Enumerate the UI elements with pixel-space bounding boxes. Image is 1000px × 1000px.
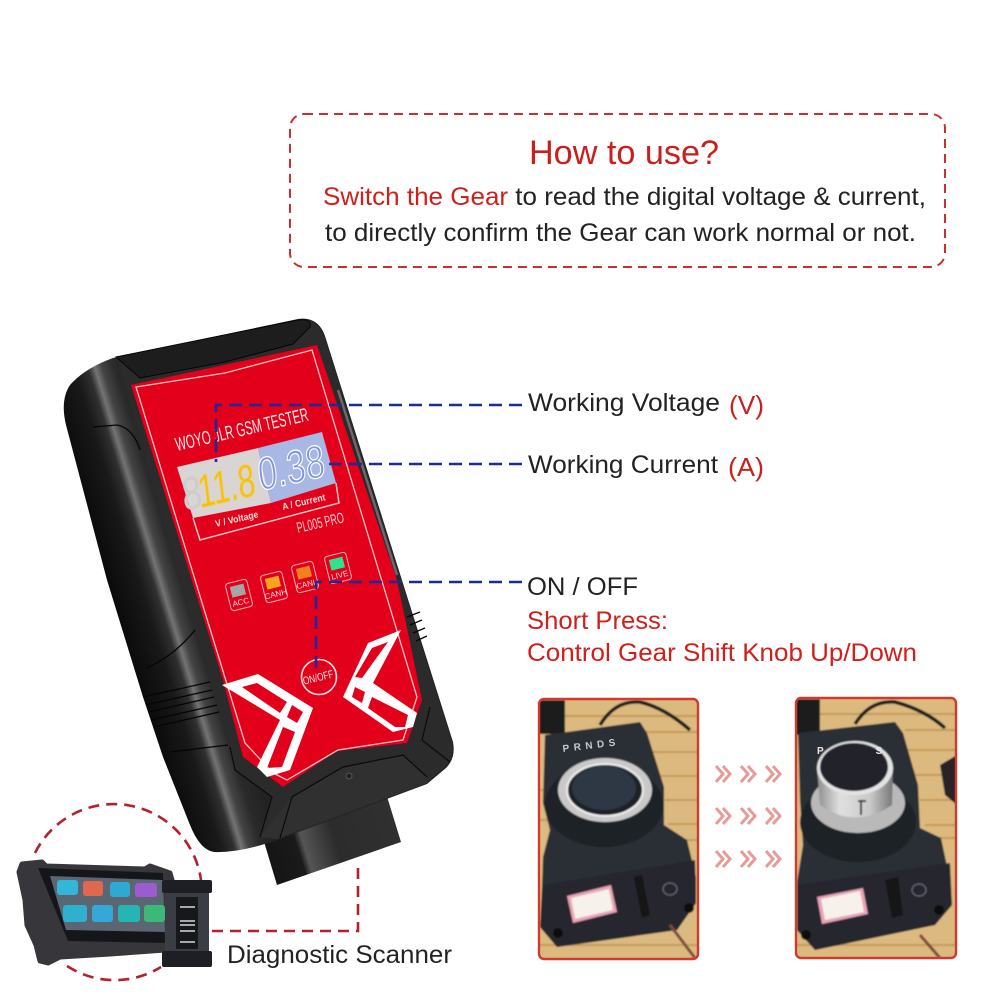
bottom bezel edge lines [230,707,450,838]
connector [262,790,401,885]
heading: How to use? [529,134,719,172]
bottom cap [260,755,427,839]
label: working current [528,451,764,482]
led: LIVE: LIVE [330,569,349,582]
display [177,432,339,540]
photo label: PRNDS: PRNDS [562,737,620,755]
red face panel [131,345,422,787]
panel title: WOYO JLR GSM TESTER [173,405,311,456]
label: working voltage: (V) [729,390,764,420]
tablet screen [38,868,165,943]
arrows: chevrons [716,766,780,867]
voltage caption: V / Voltage [214,509,260,530]
on/off button [302,660,336,694]
app icons [57,880,165,922]
on/off leader [316,582,522,668]
photo label: P S: P S [817,746,883,757]
led: CANH [260,571,289,603]
row 1 [716,766,780,782]
label: working current: (A) [728,452,764,482]
label: working current: Working Current [528,451,718,479]
left white emblem [222,674,313,777]
led: LIVE [324,552,352,584]
device: tester [64,319,454,885]
led: CANL: CANL [295,577,319,591]
model name: PL005 PRO [295,510,346,537]
connector lines: red dashed [35,804,358,980]
label: working voltage: Working Voltage [528,389,720,417]
current reading: 0.38 [255,434,327,501]
screw [346,773,352,779]
photo frame [539,699,698,959]
photo: knob raised [795,697,957,959]
tablet body [19,862,172,963]
label: on/off instructions: Short Press: [527,607,668,635]
callout: how to use box [290,114,945,267]
link to connector [212,862,358,931]
current leader [327,463,522,465]
row 2 [716,808,780,824]
label: on/off instructions [527,573,917,667]
led: CANL [291,561,319,593]
circle around scanner [35,804,201,880]
scanner: tablet and module [19,862,212,967]
right white emblem [343,630,417,732]
current caption: A / Current [281,492,327,513]
display current window [258,432,336,503]
instruction line 2: to directly confirm the Gear can work normal or not. [325,219,916,247]
ghost digit: 8 [179,465,205,521]
led: ACC [225,579,253,611]
tablet screen glow [50,876,165,932]
instruction line 1: Switch the Gear to read the digital voltage & current, [323,183,926,211]
white inset outline [136,350,417,780]
dashed frame [290,114,945,267]
front bezel [118,320,453,839]
on/off button: ON/OFF [302,668,335,688]
grip grooves [93,425,228,752]
right side rail [338,390,397,575]
display frame [193,483,339,540]
photo frame [796,698,956,958]
top cap [116,320,310,378]
display voltage window [177,448,271,518]
device body [64,319,454,852]
voltage leader [216,405,522,462]
row 3 [716,851,780,867]
right grip lines [407,612,427,641]
label: on/off instructions: ON / OFF [527,573,638,601]
leader lines: blue dashed [216,405,522,668]
circle lower arc [67,966,161,980]
label: working voltage [528,389,764,420]
photo: knob down [538,698,699,960]
led: ACC: ACC [232,596,250,609]
label: diagnostic scanner: Diagnostic Scanner [227,941,452,969]
scanner module [162,880,212,967]
voltage reading: 11.8 [195,453,258,518]
led: CANH: CANH [264,587,288,601]
label: on/off instructions: Control Gear Shift Knob Up/Down [527,639,917,667]
